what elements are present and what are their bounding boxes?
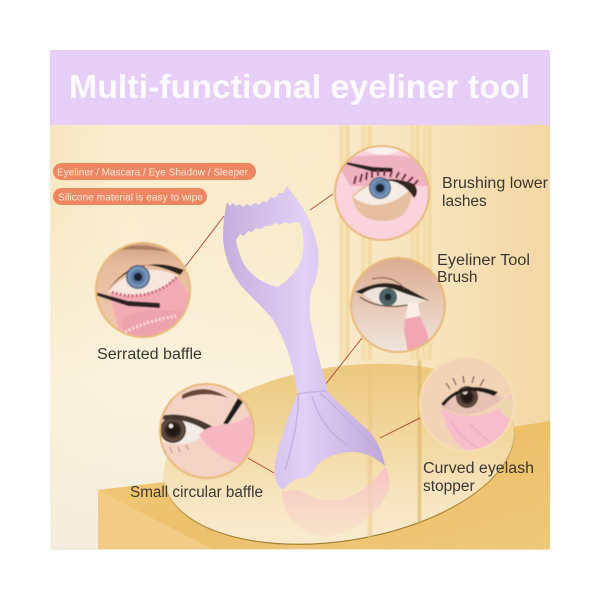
feature pills (53, 163, 256, 205)
label: eyeliner tool brush: Brush (437, 269, 478, 286)
label: small circular baffle: Small circular baffle (130, 484, 263, 501)
header band (50, 50, 550, 125)
label: curved eyelash stopper: stopper (423, 478, 475, 495)
pink baffle (282, 467, 389, 537)
eyeliner tool (223, 186, 389, 537)
infographic canvas (50, 50, 550, 550)
label: serrated baffle: Serrated baffle (97, 346, 202, 363)
fin shading (285, 391, 372, 470)
pill: uses: Eyeliner / Mascara / Eye Shadow / Sleeper (57, 166, 248, 178)
circle: eyeliner tool brush (350, 257, 446, 354)
pill: material: Silicone material is easy to wipe (58, 192, 203, 204)
mirror disc (151, 340, 527, 568)
label: eyeliner tool brush: Eyeliner Tool (437, 252, 530, 269)
purple body (223, 186, 385, 490)
label: brushing lower lashes: Brushing lower (442, 175, 548, 192)
circle: curved eyelash stopper (419, 356, 516, 452)
background scene (50, 125, 550, 550)
connector lines (185, 194, 420, 473)
circle: serrated baffle (95, 242, 191, 340)
label: brushing lower lashes: lashes (442, 193, 487, 210)
pill: uses (53, 163, 256, 180)
label: curved eyelash stopper: Curved eyelash (423, 460, 534, 477)
title: Multi-functional eyeliner tool (69, 69, 530, 106)
pill: material (53, 188, 207, 205)
circle: small circular baffle (159, 383, 256, 479)
circle: brushing lower lashes (334, 145, 430, 241)
